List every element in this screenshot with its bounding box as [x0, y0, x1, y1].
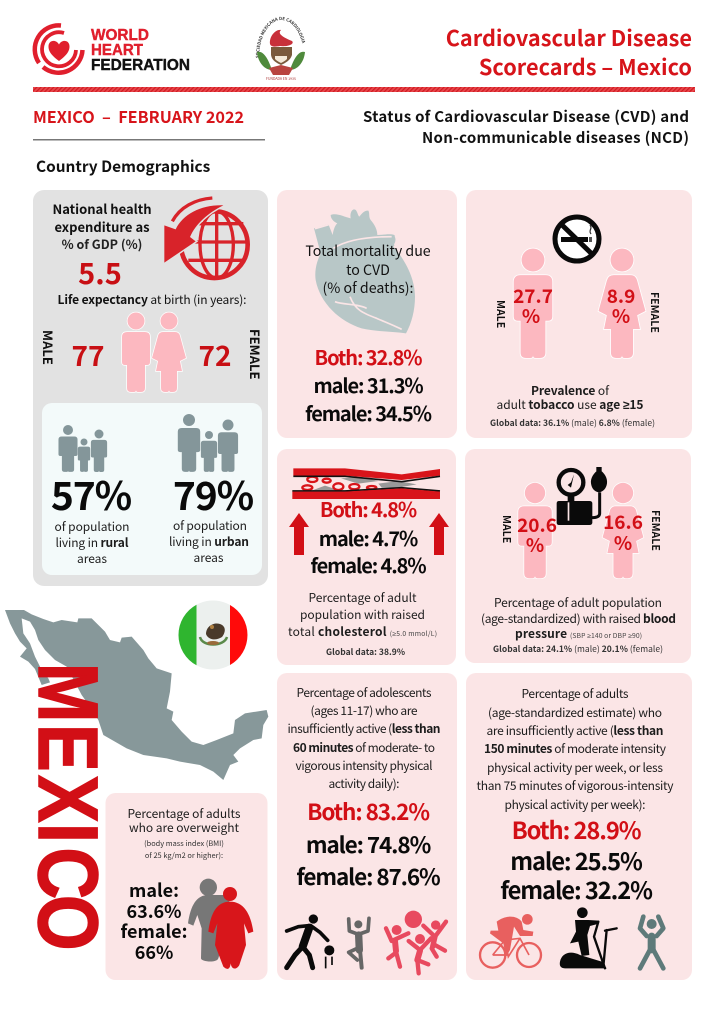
label: male: MALE	[499, 515, 514, 543]
panel: CVD mortality	[277, 190, 457, 438]
logo: World Heart Federation: FEDERATION	[91, 57, 190, 74]
icon: person with ball	[287, 914, 334, 968]
text: tobacco description: adult tobacco use age ≥15	[496, 396, 644, 413]
value: female blood pressure	[603, 508, 643, 556]
values: overweight: 63.6%	[126, 898, 182, 924]
text: global blood pressure data: Global data: 24.1% (male) 20.1% (female)	[493, 643, 663, 655]
text: blood pressure description: (age-standardized) with raised blood	[481, 610, 676, 627]
values: overweight: female:	[121, 918, 187, 944]
text: overweight description: of 25 kg/m2 or higher):	[145, 850, 223, 861]
icon: rural family	[58, 425, 107, 472]
values: overweight: 66%	[135, 939, 173, 965]
values: overweight: male:	[129, 877, 179, 903]
text: rural	[54, 518, 130, 567]
icon: artery	[292, 468, 440, 499]
values: cholesterol: male: 4.7%	[319, 523, 418, 552]
logo: Sociedad Mexicana de Cardiologia: FUNDADA EN 1935	[266, 77, 296, 82]
text: health expenditure: National health	[52, 199, 152, 218]
text: overweight description: (body mass index (BMI)	[144, 838, 224, 849]
heading: country demographics: Country Demographics	[36, 155, 211, 177]
value: female tobacco	[607, 282, 635, 329]
text: mortality description: Total mortality due	[305, 241, 431, 261]
icon: man and woman	[122, 312, 186, 392]
text: cholesterol description: Percentage of adult	[308, 589, 417, 606]
text: rural: of population	[54, 518, 130, 535]
values: mortality: Both: 32.8%	[315, 342, 422, 371]
logo: World Heart Federation	[35, 25, 190, 74]
value: female tobacco: 8.9	[607, 282, 635, 309]
value: female tobacco: %	[612, 302, 630, 329]
values: adults: female: 32.2%	[500, 872, 653, 906]
text: mortality description	[305, 241, 431, 298]
vertical title: MEXICO: MEXICO	[20, 663, 115, 950]
value: female blood pressure: 16.6	[603, 508, 643, 535]
text: adult description: are insufficiently active (less than	[486, 722, 664, 739]
icon: urban family	[178, 414, 238, 472]
text: overweight description: Percentage of adults	[128, 805, 241, 822]
icon: no smoking	[555, 217, 599, 261]
text: blood pressure description: pressure (SBP ≥140 or DBP ≥90)	[515, 625, 642, 642]
text: adolescent description: activity daily):	[328, 775, 400, 792]
values: cholesterol: female: 4.8%	[310, 550, 426, 579]
icon: female figure	[603, 483, 643, 578]
value: male tobacco: 27.7	[513, 282, 553, 309]
values: adolescents: male: 74.8%	[306, 828, 431, 860]
text: adolescent description: insufficiently active (less than	[288, 720, 440, 737]
value: urban: 79%	[173, 466, 254, 522]
panel: tobacco	[466, 190, 692, 438]
values: mortality	[305, 342, 432, 427]
text: adolescent description: (ages 11-17) who are	[310, 702, 418, 719]
subtitle: Status of Cardiovascular Disease (CVD) and	[363, 106, 689, 127]
icon: yoga figure	[349, 918, 369, 968]
date heading: MEXICO – FEBRUARY 2022	[33, 104, 244, 128]
value: female blood pressure: %	[614, 529, 632, 556]
panel: demographics	[33, 190, 268, 586]
icon: dancing group	[386, 911, 446, 973]
arrow: right up	[429, 513, 449, 555]
icon: heart	[314, 209, 415, 333]
subtitle	[363, 106, 689, 148]
arrow: left up	[289, 513, 309, 555]
panel: adult inactivity	[466, 673, 692, 980]
text: adult description: Percentage of adults	[522, 685, 629, 702]
text: blood pressure description	[481, 594, 676, 642]
text: rural: areas	[77, 550, 107, 567]
logo: World Heart Federation: WORLD	[91, 27, 149, 44]
label: female: FEMALE	[246, 329, 265, 380]
icon: stretching figure	[640, 917, 663, 968]
text: urban: living in urban	[169, 533, 249, 550]
value: male tobacco	[513, 282, 553, 329]
text: life expectancy: Life expectancy at birth (in years):	[58, 291, 246, 308]
panel: rural and urban population	[42, 403, 262, 575]
map of Mexico	[5, 610, 268, 780]
text: adult description: than 75 minutes of vigorous-intensity	[476, 777, 674, 794]
values: overweight	[121, 877, 187, 965]
text: global cholesterol data: Global data: 38.9%	[326, 646, 405, 658]
text: blood pressure description: Percentage of adult population	[494, 594, 662, 611]
value: health expenditure: 5.5	[78, 251, 122, 293]
icon: male figure	[514, 249, 552, 358]
values: mortality: female: 34.5%	[305, 398, 432, 427]
label: male: MALE	[39, 330, 58, 365]
values: adults: male: 25.5%	[510, 843, 643, 877]
text: overweight description	[128, 805, 241, 861]
values: cholesterol: Both: 4.8%	[320, 494, 417, 523]
text: cholesterol description: population with raised	[300, 606, 425, 623]
text: health expenditure	[52, 199, 152, 253]
icon: overweight man and woman	[188, 879, 253, 969]
panel: overweight	[106, 793, 268, 980]
label: male: MALE	[493, 300, 508, 328]
text: adolescent description: vigorous intensity physical	[296, 757, 432, 774]
panel: blood pressure	[465, 449, 691, 663]
value: male blood pressure: 20.6	[517, 511, 557, 538]
value: male blood pressure: %	[526, 531, 544, 558]
icon: elliptical machine	[560, 907, 617, 968]
value: male blood pressure	[517, 511, 557, 558]
icon: cyclist	[480, 914, 541, 968]
text: adolescent description: 60 minutes of moderate- to	[293, 739, 435, 756]
text: adolescent description: Percentage of adolescents	[296, 684, 432, 701]
text: tobacco description	[496, 382, 644, 413]
title: Cardiovascular Disease	[446, 22, 692, 53]
text: urban: areas	[194, 549, 224, 566]
text: adult description	[476, 685, 674, 813]
title: Scorecards – Mexico	[479, 51, 692, 82]
text: mortality description: to CVD	[346, 260, 390, 280]
logo: World Heart Federation: HEART	[91, 42, 144, 59]
values: adults	[500, 812, 653, 906]
label: female: FEMALE	[647, 292, 662, 333]
value: rural: 57%	[51, 466, 132, 522]
text: overweight description: who are overweight	[129, 819, 239, 836]
text: adolescent description	[288, 684, 440, 792]
values: mortality: male: 31.3%	[313, 370, 423, 399]
values: adolescents: female: 87.6%	[296, 860, 440, 892]
value: female life expectancy: 72	[198, 335, 232, 375]
logo: Sociedad Mexicana de Cardiologia	[256, 16, 306, 82]
panel: adolescent inactivity	[277, 673, 457, 980]
text: adult description: physical activity per week):	[504, 796, 646, 813]
text: adult description: 150 minutes of moderate intensity	[484, 740, 667, 757]
logo: Sociedad Mexicana de Cardiologia: SOCIEDAD MEXICANA DE CARDIOLOGIA	[256, 16, 306, 58]
text: cholesterol description: total cholesterol (≥5.0 mmol/L)	[288, 623, 437, 640]
text: tobacco description: Prevalence of	[531, 382, 610, 399]
icon: male figure	[518, 483, 552, 578]
flag of Mexico	[178, 600, 248, 670]
value: male tobacco: %	[522, 302, 540, 329]
values: adolescents	[296, 795, 440, 892]
icon: blood pressure monitor	[557, 467, 607, 525]
values: adults: Both: 28.9%	[512, 812, 642, 846]
title	[446, 22, 692, 82]
subtitle: Non-communicable diseases (NCD)	[422, 127, 689, 148]
values: cholesterol	[310, 494, 426, 579]
text: rural: living in rural	[56, 534, 129, 551]
text: cholesterol description	[288, 589, 437, 640]
text: urban: of population	[173, 517, 247, 534]
values: adolescents: Both: 83.2%	[307, 795, 429, 827]
icon: female figure	[599, 249, 645, 358]
text: mortality description: (% of deaths):	[323, 278, 413, 298]
value: male life expectancy: 77	[71, 335, 105, 375]
text: health expenditure: expenditure as	[54, 217, 150, 236]
text: adult description: (age-standardized estimate) who	[488, 704, 662, 721]
icon: globe with arrow	[164, 198, 248, 278]
text: urban	[169, 517, 249, 566]
label: female: FEMALE	[648, 510, 663, 551]
text: adult description: physical activity per week, or less	[487, 759, 663, 776]
text: health expenditure: % of GDP (%)	[62, 234, 142, 253]
text: global tobacco data: Global data: 36.1% (male) 6.8% (female)	[490, 417, 655, 429]
panel: cholesterol	[277, 449, 456, 665]
